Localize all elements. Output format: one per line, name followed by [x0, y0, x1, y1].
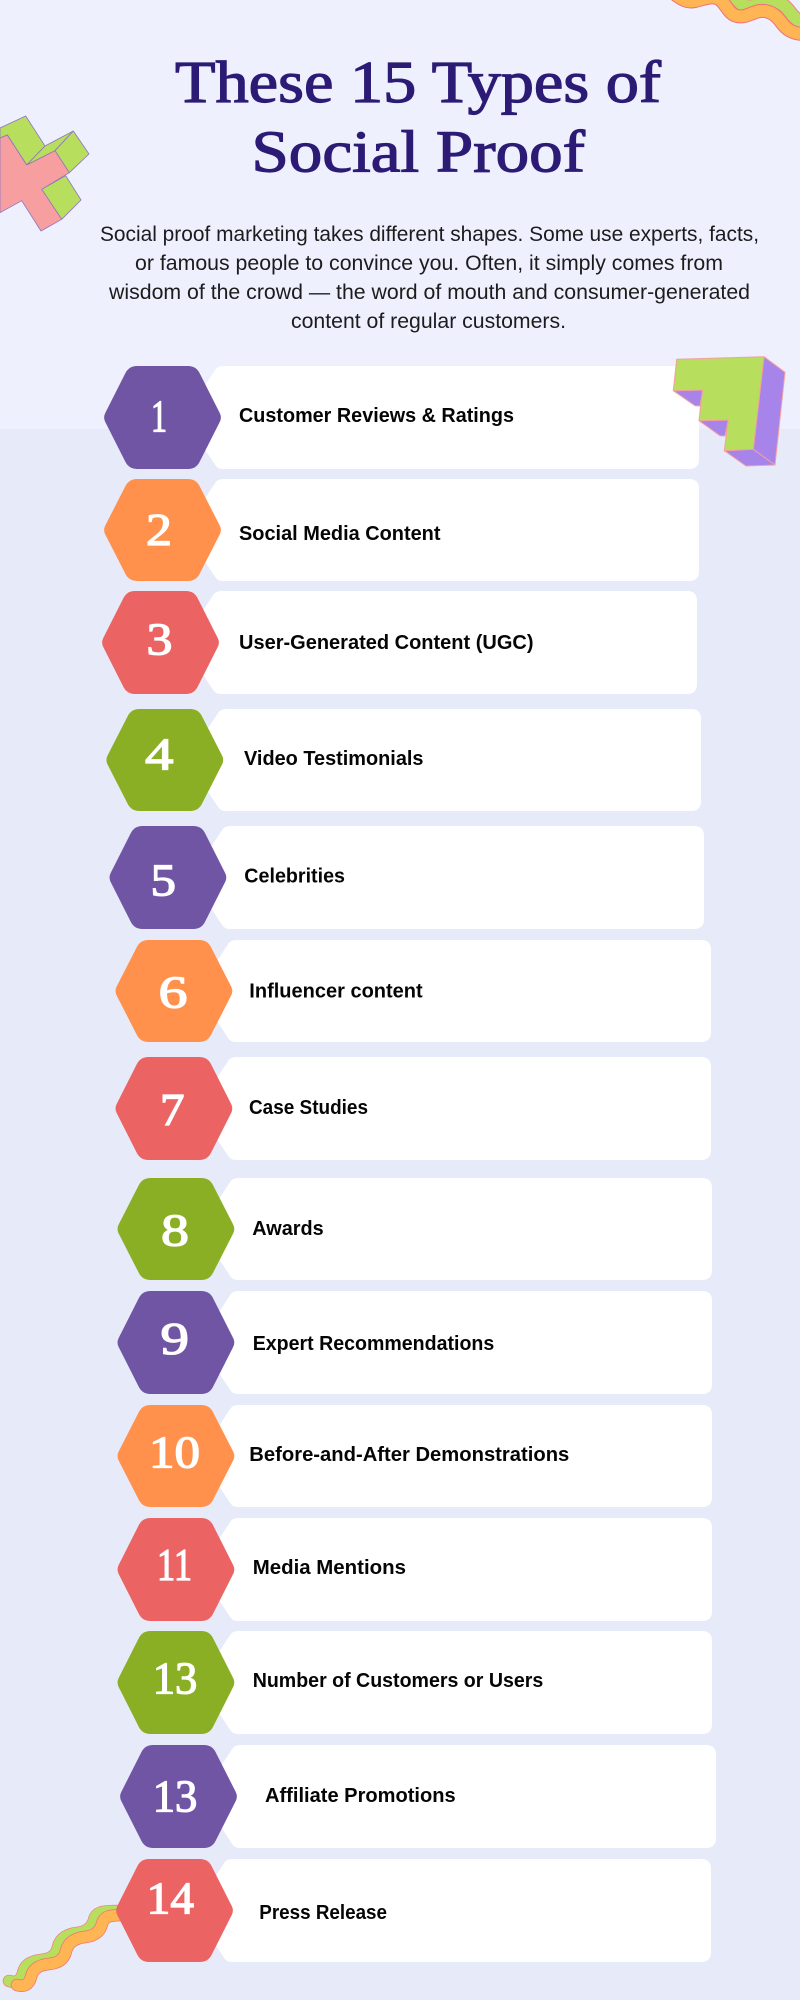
number: 6 — [158, 967, 188, 1018]
background: lower band — [0, 429, 800, 2000]
title: These 15 Types of — [175, 49, 661, 115]
hexagon — [104, 366, 221, 469]
hexagon — [120, 1745, 237, 1848]
label: Affiliate Promotions — [265, 1784, 456, 1807]
list item 5 — [110, 826, 704, 929]
list item 11 — [118, 1518, 712, 1621]
intro paragraph: or famous people to convince you. Often, it simply comes from — [135, 252, 723, 275]
list item 12 (printed as 13) — [118, 1631, 712, 1734]
number: 13 — [153, 1652, 197, 1703]
hexagon — [116, 940, 232, 1042]
number: 1 — [151, 391, 167, 442]
label: Social Media Content — [239, 522, 441, 545]
hexagon — [110, 826, 226, 929]
intro paragraph: content of regular customers. — [291, 310, 566, 333]
number: 4 — [145, 728, 174, 779]
card — [199, 1178, 712, 1280]
card — [199, 1631, 712, 1734]
list item 14 — [116, 1859, 711, 1962]
list item 7 — [116, 1057, 711, 1160]
list item 8 — [118, 1178, 712, 1280]
label: Press Release — [259, 1901, 387, 1924]
card — [187, 709, 701, 811]
number: 3 — [146, 613, 172, 664]
hexagon — [118, 1518, 234, 1621]
number: 2 — [146, 504, 172, 555]
hexagon — [118, 1178, 234, 1280]
background: top band — [0, 0, 800, 429]
hexagon — [116, 1859, 233, 1962]
hexagon — [118, 1291, 234, 1394]
list item 13 — [120, 1745, 716, 1848]
list item 6 — [116, 940, 711, 1042]
number: 5 — [150, 855, 176, 906]
hexagon — [116, 1057, 232, 1160]
number: 14 — [147, 1872, 194, 1923]
number: 8 — [161, 1205, 189, 1256]
card — [182, 591, 697, 694]
card — [191, 826, 704, 929]
list item 1 — [104, 366, 699, 469]
card — [199, 1291, 712, 1394]
intro paragraph: Social proof marketing takes different shapes. Some use experts, facts, — [100, 223, 759, 246]
card — [199, 1405, 712, 1507]
label: Video Testimonials — [244, 747, 424, 770]
label: Case Studies — [249, 1096, 368, 1119]
card — [197, 1057, 711, 1160]
label: Awards — [252, 1217, 324, 1240]
card — [184, 479, 699, 581]
intro paragraph: wisdom of the crowd — the word of mouth and consumer-generated — [108, 281, 750, 304]
label: Expert Recommendations — [253, 1332, 494, 1355]
title — [175, 49, 661, 184]
list item 2 — [104, 479, 699, 581]
number: 11 — [157, 1539, 192, 1590]
hexagon — [118, 1631, 234, 1734]
card — [201, 1745, 716, 1848]
label: Customer Reviews & Ratings — [239, 404, 514, 427]
card — [193, 1859, 711, 1962]
title: Social Proof — [252, 118, 585, 184]
hexagon — [104, 479, 221, 581]
label: Media Mentions — [253, 1556, 406, 1579]
card — [197, 940, 711, 1042]
number: 13 — [153, 1771, 197, 1822]
list item 3 — [102, 591, 697, 694]
label: Number of Customers or Users — [253, 1669, 543, 1692]
decoration: wave top right — [672, 0, 800, 34]
intro paragraph — [100, 223, 759, 333]
decoration: 3D cross top left — [0, 116, 89, 231]
label: Before-and-After Demonstrations — [249, 1443, 569, 1466]
number: 9 — [160, 1313, 189, 1364]
card — [184, 366, 699, 469]
hexagon — [118, 1405, 234, 1507]
list item 4 — [106, 709, 701, 811]
number: 10 — [149, 1426, 200, 1477]
hexagon — [102, 591, 219, 694]
list item 9 — [118, 1291, 712, 1394]
label: Celebrities — [244, 864, 345, 887]
decoration: wave bottom left — [9, 1911, 125, 1986]
label: Influencer content — [249, 980, 423, 1003]
list item 10 — [118, 1405, 712, 1507]
decoration: 3D arrow corner top right — [673, 357, 785, 466]
hexagon — [106, 709, 223, 811]
label: User-Generated Content (UGC) — [239, 631, 534, 654]
card — [199, 1518, 712, 1621]
number: 7 — [160, 1084, 184, 1135]
